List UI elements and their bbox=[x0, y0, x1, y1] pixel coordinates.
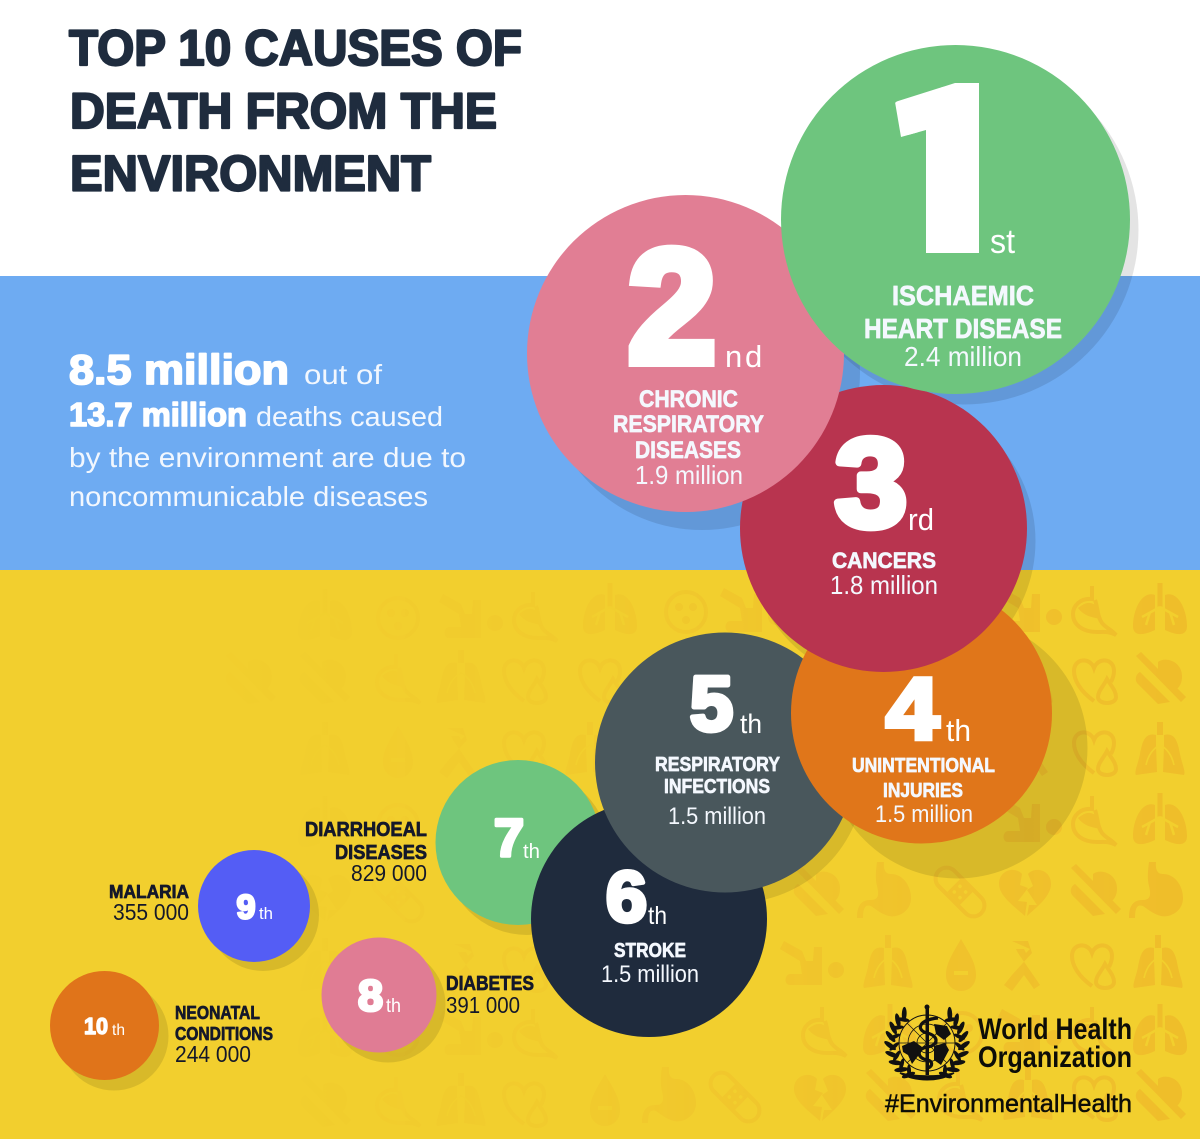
label: malaria: MALARIA bbox=[109, 882, 189, 902]
circle 9th: malaria bbox=[198, 850, 310, 962]
label: malaria bbox=[109, 882, 189, 925]
circle 4th: unintentional injuries: INJURIES bbox=[883, 780, 963, 802]
circle 2nd: chronic respiratory diseases: RESPIRATORY bbox=[613, 411, 764, 438]
circle 2nd: chronic respiratory diseases: 2 bbox=[628, 217, 716, 397]
summary statement: deaths caused bbox=[256, 401, 443, 432]
WHO wordmark: World Health bbox=[978, 1013, 1132, 1046]
yellow band bbox=[0, 570, 1200, 1139]
circle 2nd: chronic respiratory diseases: nd bbox=[725, 339, 762, 374]
circle 3rd: cancers: rd bbox=[908, 502, 934, 537]
circle 5th: respiratory infections bbox=[595, 632, 855, 892]
circle 10th: neonatal conditions: 10 bbox=[84, 1013, 108, 1039]
circle 2nd: chronic respiratory diseases: CHRONIC bbox=[639, 386, 738, 413]
circle 9th: malaria: 9 bbox=[236, 888, 256, 926]
blue band bbox=[0, 276, 1200, 570]
circle 1st: ischaemic heart disease: 2.4 million bbox=[904, 341, 1022, 372]
circle 7th: diarrhoeal diseases: th bbox=[523, 841, 540, 863]
circle 5th: respiratory infections: INFECTIONS bbox=[664, 776, 770, 798]
faded health icon pattern bbox=[728, 583, 1187, 1123]
circle 10th: neonatal conditions: th bbox=[112, 1022, 125, 1039]
summary statement: 13.7 million bbox=[69, 396, 247, 433]
circle 8th: diabetes: th bbox=[386, 996, 401, 1017]
label: diarrhoeal diseases bbox=[305, 819, 427, 886]
label: neonatal conditions: CONDITIONS bbox=[175, 1024, 273, 1044]
label: neonatal conditions bbox=[175, 1003, 273, 1067]
summary statement: out of bbox=[304, 359, 382, 390]
circle 8th: diabetes: 8 bbox=[358, 972, 383, 1020]
label: diabetes bbox=[446, 973, 534, 1018]
circle 10th: neonatal conditions bbox=[50, 971, 159, 1080]
label: diabetes: 391 000 bbox=[446, 992, 520, 1018]
label: diarrhoeal diseases: 829 000 bbox=[351, 860, 427, 886]
title bbox=[69, 20, 522, 202]
white header band bbox=[0, 0, 1200, 276]
circle 4th: unintentional injuries bbox=[791, 582, 1052, 844]
circle 1st: ischaemic heart disease: HEART DISEASE bbox=[864, 313, 1062, 344]
label: diarrhoeal diseases: DISEASES bbox=[335, 842, 427, 864]
circle 6th: stroke: 6 bbox=[606, 859, 647, 938]
circle 5th: respiratory infections: 5 bbox=[690, 662, 733, 748]
WHO wordmark: Organization bbox=[978, 1041, 1132, 1074]
label: neonatal conditions: NEONATAL bbox=[175, 1003, 260, 1023]
circle 3rd: cancers: CANCERS bbox=[832, 548, 936, 573]
circle 1st: ischaemic heart disease: st bbox=[990, 223, 1016, 261]
label: diabetes: DIABETES bbox=[446, 973, 534, 995]
circle 3rd: cancers: 1.8 million bbox=[830, 570, 938, 600]
circle 4th: unintentional injuries: UNINTENTIONAL bbox=[852, 755, 995, 777]
icon: WHO emblem bbox=[883, 1004, 971, 1080]
title: ENVIRONMENT bbox=[70, 146, 431, 202]
title: DEATH FROM THE bbox=[70, 83, 497, 139]
summary statement: noncommunicable diseases bbox=[69, 481, 428, 512]
label: diarrhoeal diseases: DIARRHOEAL bbox=[305, 819, 427, 841]
circle 3rd: cancers: 3 bbox=[835, 414, 907, 553]
circle 6th: stroke: 1.5 million bbox=[601, 961, 699, 988]
circle 5th: respiratory infections: RESPIRATORY bbox=[655, 754, 781, 776]
circle 5th: respiratory infections: th bbox=[740, 709, 762, 739]
summary statement: 8.5 million bbox=[69, 346, 289, 393]
summary statement: by the environment are due to bbox=[69, 442, 466, 473]
label: neonatal conditions: 244 000 bbox=[175, 1041, 251, 1067]
circle 6th: stroke: STROKE bbox=[614, 940, 686, 962]
circle 8th: diabetes bbox=[322, 938, 436, 1052]
label: malaria: 355 000 bbox=[113, 899, 189, 925]
circle 1st: ischaemic heart disease: 1 bbox=[895, 35, 1003, 303]
circle 1st: ischaemic heart disease: ISCHAEMIC bbox=[892, 280, 1034, 311]
circle 7th: diarrhoeal diseases: 7 bbox=[494, 809, 524, 868]
circle 4th: unintentional injuries: 1.5 million bbox=[875, 801, 973, 828]
circle 2nd: chronic respiratory diseases: DISEASES bbox=[635, 437, 741, 464]
circle 2nd: chronic respiratory diseases: 1.9 million bbox=[635, 460, 743, 490]
circle 4th: unintentional injuries: th bbox=[946, 713, 971, 748]
title: TOP 10 CAUSES OF bbox=[69, 20, 522, 76]
summary statement bbox=[69, 346, 466, 512]
circle 1st: ischaemic heart disease bbox=[781, 35, 1130, 394]
circle 2nd: chronic respiratory diseases bbox=[527, 195, 844, 512]
circle 4th: unintentional injuries: 4 bbox=[886, 660, 939, 758]
circle 9th: malaria: th bbox=[259, 904, 273, 923]
circle 6th: stroke bbox=[531, 801, 767, 1037]
hashtag: #EnvironmentalHealth bbox=[885, 1090, 1132, 1118]
circle 6th: stroke: th bbox=[648, 902, 667, 930]
circle 7th: diarrhoeal diseases bbox=[436, 760, 600, 925]
WHO wordmark bbox=[978, 1013, 1132, 1074]
circle 5th: respiratory infections: 1.5 million bbox=[668, 803, 766, 830]
circle 3rd: cancers bbox=[740, 385, 1027, 672]
